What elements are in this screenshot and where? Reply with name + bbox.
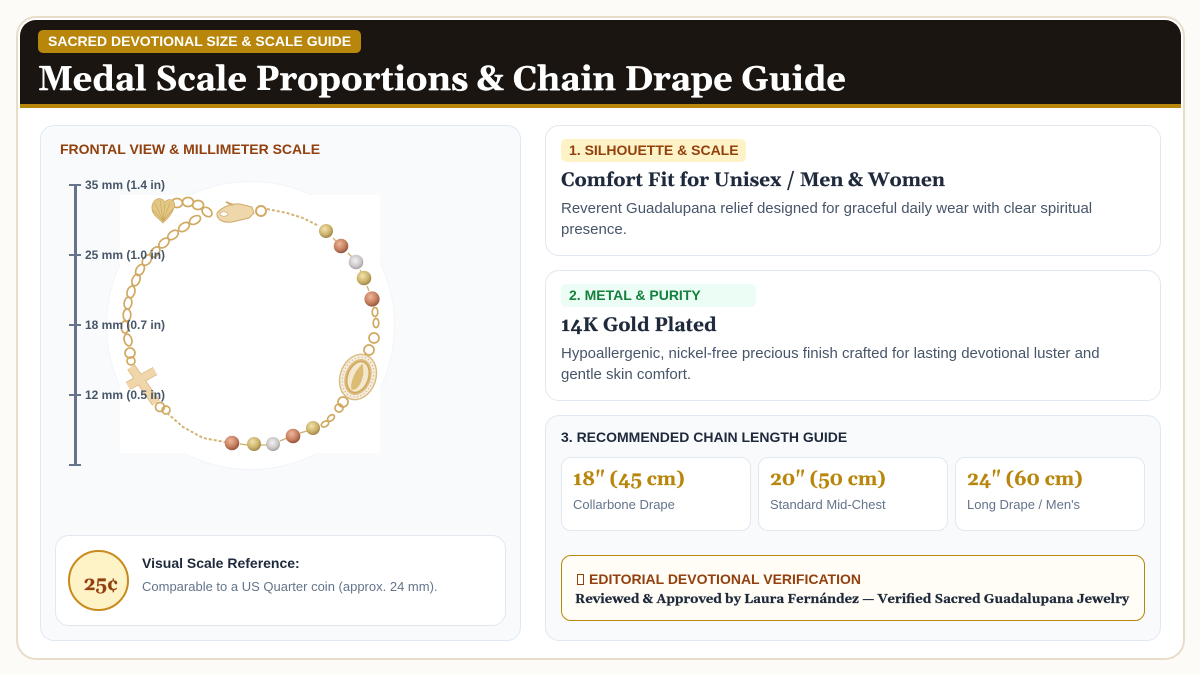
label 25 mm: 25 mm (1.0 in) xyxy=(85,248,165,262)
chain guide heading: 3. RECOMMENDED CHAIN LENGTH GUIDE xyxy=(561,429,847,445)
tick bottom xyxy=(69,464,81,466)
panel: silhouette and scale xyxy=(545,125,1161,256)
heart charm xyxy=(152,199,175,223)
bracelet image xyxy=(120,196,380,451)
editorial verification callout xyxy=(561,555,1145,621)
label 12 mm: 12 mm (0.5 in) xyxy=(85,388,165,402)
coin description: Comparable to a US Quarter coin (approx. 24 mm). xyxy=(142,579,438,594)
panel: metal and purity xyxy=(545,270,1161,401)
panel: frontal view and scale xyxy=(40,125,521,641)
length card 24: Long Drape / Men's xyxy=(967,497,1080,512)
product image backdrop circle xyxy=(106,181,395,470)
tick 35 mm xyxy=(69,184,81,186)
beads xyxy=(225,224,380,451)
body 2 xyxy=(561,345,1100,383)
length card 18: 18" (45 cm) xyxy=(573,468,685,492)
body 1 xyxy=(561,200,1092,238)
body 2: Hypoallergenic, nickel-free precious finish crafted for lasting devotional luster and xyxy=(561,345,1100,362)
length card 20 xyxy=(758,457,948,531)
title: Medal Scale Proportions & Chain Drape Guide xyxy=(38,58,846,102)
tick 25 mm xyxy=(69,254,81,256)
tick 18 mm xyxy=(69,324,81,326)
tick 12 mm xyxy=(69,394,81,396)
Guadalupe medal xyxy=(332,348,384,406)
length card 20: 20" (50 cm) xyxy=(770,468,886,492)
length card 24: 24" (60 cm) xyxy=(967,468,1083,492)
callout heading: EDITORIAL DEVOTIONAL VERIFICATION xyxy=(589,571,861,587)
heading 1: Comfort Fit for Unisex / Men & Women xyxy=(561,169,945,193)
ruler and scale labels xyxy=(69,178,165,466)
length card 18 xyxy=(561,457,751,531)
tag 1: 1. SILHOUETTE & SCALE xyxy=(569,142,739,158)
tag 2 xyxy=(561,284,756,307)
callout text: Reviewed & Approved by Laura Fernández — Verified Sacred Guadalupana Jewelry xyxy=(575,592,1129,608)
clasp xyxy=(217,202,254,222)
body 2: gentle skin comfort. xyxy=(561,366,691,383)
quarter coin xyxy=(68,550,129,611)
header badge xyxy=(38,30,361,53)
ruler axis xyxy=(74,185,77,466)
tag 2: 2. METAL & PURITY xyxy=(569,287,701,303)
length card 20: Standard Mid-Chest xyxy=(770,497,886,512)
product image backdrop xyxy=(120,195,380,453)
heading 2: 14K Gold Plated xyxy=(561,314,717,338)
panel: chain length guide xyxy=(545,415,1161,641)
missing-glyph icon xyxy=(577,574,584,585)
length card 18: Collarbone Drape xyxy=(573,497,675,512)
tag 1 xyxy=(561,139,746,162)
label 18 mm: 18 mm (0.7 in) xyxy=(85,318,165,332)
quarter coin: 25¢ xyxy=(84,573,118,597)
header band xyxy=(20,20,1181,108)
label 35 mm: 35 mm (1.4 in) xyxy=(85,178,165,192)
header badge: SACRED DEVOTIONAL SIZE & SCALE GUIDE xyxy=(48,33,351,49)
coin title: Visual Scale Reference: xyxy=(142,555,300,571)
cross pendant xyxy=(128,367,156,403)
body 1: presence. xyxy=(561,221,627,238)
panel heading: FRONTAL VIEW & MILLIMETER SCALE xyxy=(60,141,320,157)
coin reference card xyxy=(55,535,506,626)
length card 24 xyxy=(955,457,1145,531)
body 1: Reverent Guadalupana relief designed for graceful daily wear with clear spiritual xyxy=(561,200,1092,217)
